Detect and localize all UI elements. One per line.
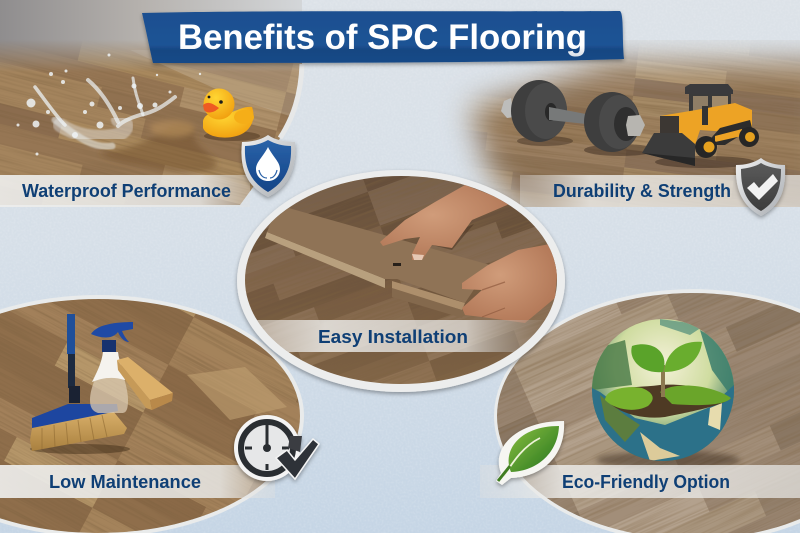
icon: rubber duck <box>203 88 260 141</box>
icon: toy loader <box>642 84 759 168</box>
icon: check shield <box>736 158 785 216</box>
icon: dumbbell <box>501 80 656 156</box>
icon: clock check <box>234 415 319 481</box>
panel rim <box>280 64 302 138</box>
hand upper <box>380 185 512 260</box>
globe shadow <box>596 451 740 469</box>
label strip <box>0 465 275 498</box>
icon: green leaf <box>496 421 564 485</box>
panel: easy installation <box>237 170 565 392</box>
panel: waterproof performance <box>0 0 302 207</box>
panel: eco-friendly option <box>480 289 800 533</box>
planks being joined <box>265 205 490 318</box>
label: durability and strength: Durability & Strength <box>553 180 731 201</box>
label: waterproof performance: Waterproof Performance <box>22 180 231 201</box>
icon: spray bottle <box>90 322 133 413</box>
title: Benefits of SPC Flooring <box>178 18 587 57</box>
panel: low maintenance <box>0 295 319 533</box>
hand lower <box>462 243 558 323</box>
title banner <box>142 11 624 63</box>
panel: durability and strength <box>452 40 800 220</box>
icon: broom <box>30 314 130 454</box>
label strip <box>250 320 550 352</box>
label: eco-friendly option: Eco-Friendly Option <box>562 471 730 492</box>
water splash <box>16 54 201 156</box>
icon: wooden block <box>117 357 173 410</box>
label strip <box>480 465 800 498</box>
puddle <box>100 120 217 173</box>
icon: globe with seedling <box>592 319 734 461</box>
icon: water shield <box>241 135 295 197</box>
label: low maintenance: Low Maintenance <box>49 471 201 492</box>
label strip <box>0 175 250 207</box>
label strip <box>520 175 800 207</box>
label: easy installation: Easy Installation <box>318 326 468 347</box>
